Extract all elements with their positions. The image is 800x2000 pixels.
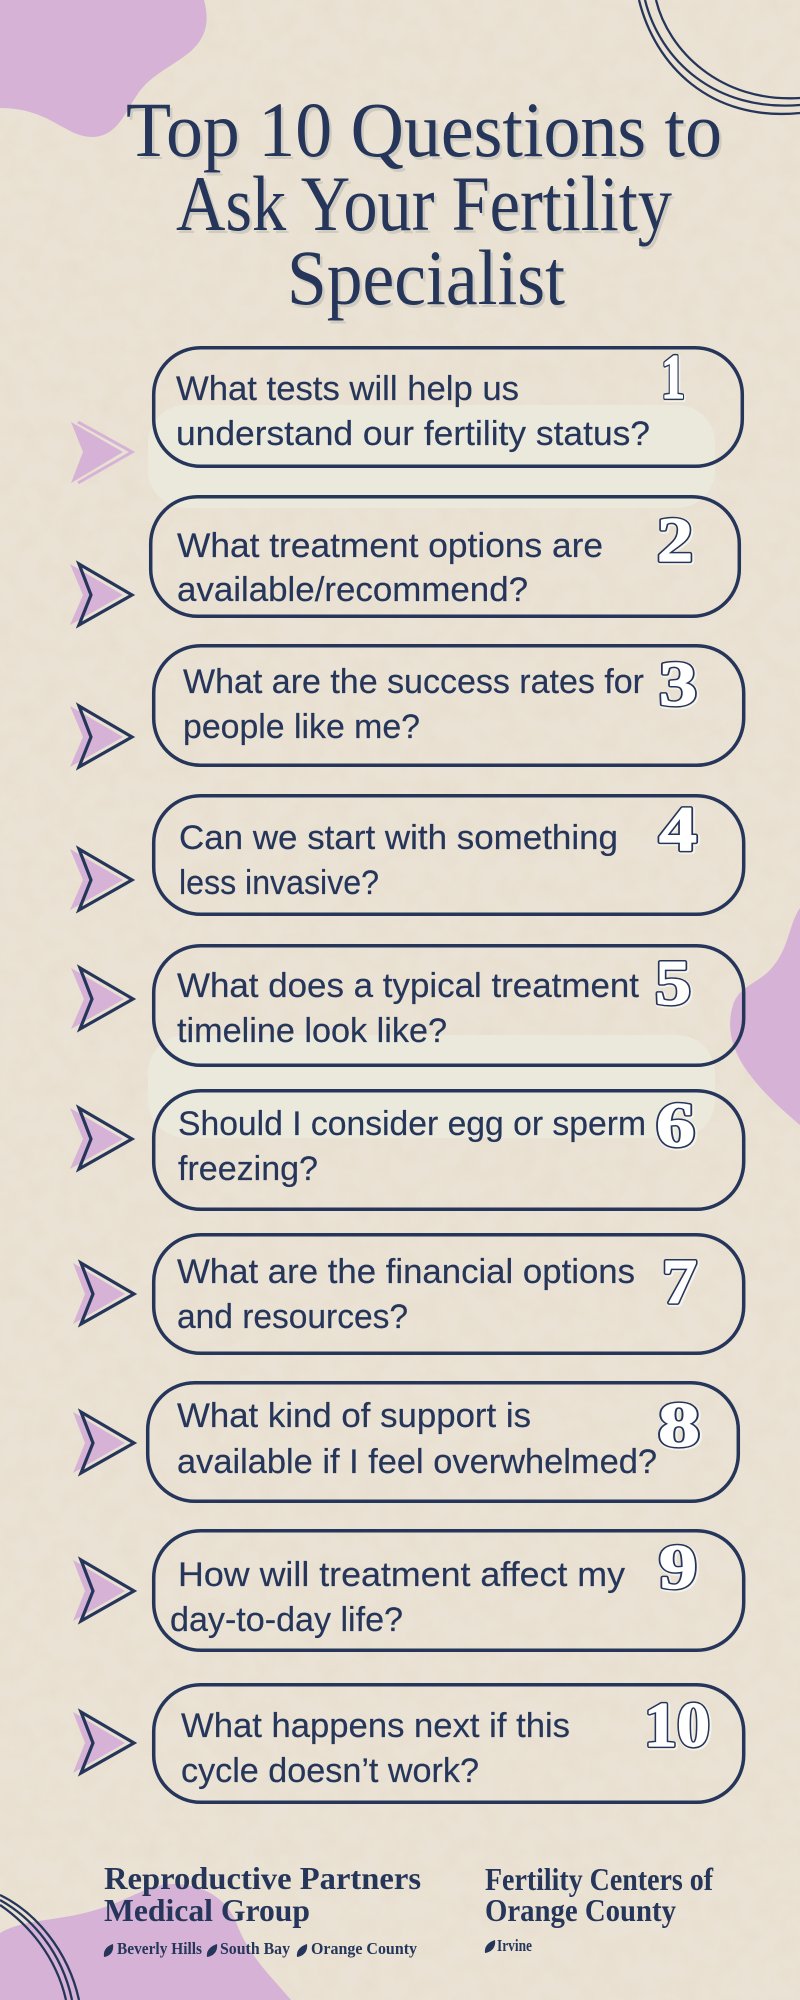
number 9: 9 (660, 1532, 698, 1603)
pill 10 (154, 1685, 744, 1802)
question 3 text: people like me? (183, 708, 420, 746)
logo: Fertility Centers of Orange County: Fertility Centers of (485, 1861, 713, 1897)
number 1: 1 (661, 341, 685, 412)
title: Top 10 Questions to (128, 89, 724, 176)
decorative blob: right (730, 908, 800, 1125)
number 2: 2 (657, 504, 693, 575)
logo: Reproductive Partners Medical Group (104, 1860, 421, 1958)
title: Specialist (290, 237, 568, 324)
arrow 5 (71, 968, 133, 1029)
logo: Reproductive Partners Medical Group: Beverly Hills (117, 1939, 202, 1958)
arrow 1 (71, 422, 132, 483)
number 9: 9 (659, 1531, 697, 1602)
pill 1 (154, 348, 742, 466)
title: Ask Your Fertility (176, 160, 672, 247)
arrow 6 (70, 1108, 132, 1169)
question 6 text: freezing? (178, 1150, 318, 1188)
pill 9 (154, 1531, 744, 1650)
arrow 3 (70, 706, 132, 767)
question 2 text: What treatment options are (177, 527, 603, 565)
decorative rings: bottom left (0, 1895, 79, 2000)
number 4: 4 (660, 794, 698, 865)
icon: leaf (207, 1944, 217, 1957)
question 7 text (177, 1253, 635, 1336)
pill 7 (154, 1235, 744, 1353)
arrow 4 (70, 849, 132, 910)
icon: leaf (485, 1940, 495, 1953)
number 5: 5 (655, 947, 691, 1018)
number 1: 1 (662, 342, 686, 413)
panel: question 1 (71, 341, 742, 483)
question 9 text (170, 1556, 626, 1639)
number 6: 6 (657, 1090, 696, 1161)
number 10: 10 (644, 1689, 710, 1760)
pill 4 (154, 796, 744, 914)
logo: Reproductive Partners Medical Group: Orange County (311, 1939, 417, 1958)
pill 8 (148, 1383, 738, 1501)
question 10 text: cycle doesn’t work? (181, 1752, 479, 1790)
icon: leaf (104, 1944, 113, 1957)
panel: question 4 (70, 793, 744, 914)
logo: Fertility Centers of Orange County: Irvine (497, 1936, 532, 1955)
panel: question 2 (70, 497, 739, 625)
number 4: 4 (659, 793, 697, 864)
question 8 text: What kind of support is (177, 1397, 531, 1435)
question 10 text: What happens next if this (181, 1707, 570, 1745)
question 8 text: available if I feel overwhelmed? (177, 1443, 657, 1481)
panel: question 6 (70, 1089, 744, 1209)
panel: question 3 (70, 646, 744, 767)
logo: Reproductive Partners Medical Group: Reproductive Partners (104, 1860, 421, 1896)
question 5 text: timeline look like? (177, 1012, 447, 1050)
question 3 text: What are the success rates for (183, 663, 644, 701)
question 8 text (177, 1397, 657, 1481)
question 4 text: less invasive? (179, 864, 379, 902)
question 7 text: and resources? (177, 1298, 408, 1336)
number 4: 4 (659, 793, 697, 864)
number 2: 2 (657, 504, 693, 575)
question 1 text: understand our fertility status? (176, 415, 650, 453)
question 6 text (178, 1105, 646, 1188)
number 3: 3 (659, 648, 697, 719)
number 3: 3 (660, 649, 698, 720)
number 7: 7 (663, 1247, 698, 1318)
panel: question 9 (73, 1531, 744, 1650)
logo: Reproductive Partners Medical Group: South Bay (220, 1939, 290, 1958)
pill 3 (154, 646, 744, 765)
decorative blob: top left (0, 0, 207, 137)
arrow 8 (73, 1412, 134, 1473)
panel: question 7 (73, 1235, 744, 1353)
logo: Fertility Centers of Orange County: Orange County (485, 1892, 676, 1928)
question 10 text (181, 1707, 570, 1790)
highlight patch behind questions 1 and 2 (148, 405, 715, 508)
logo: Fertility Centers of Orange County (485, 1861, 713, 1955)
pill 6 (154, 1091, 744, 1209)
number 7: 7 (662, 1246, 697, 1317)
question 9 text: day-to-day life? (170, 1601, 403, 1639)
logo: Reproductive Partners Medical Group: Medical Group (104, 1892, 310, 1928)
arrow 7 (73, 1263, 134, 1324)
panel: question 10 (73, 1685, 744, 1802)
number 10: 10 (645, 1690, 711, 1761)
question 4 text: Can we start with something (179, 819, 618, 857)
number 6: 6 (656, 1089, 695, 1160)
question 6 text: Should I consider egg or sperm (178, 1105, 646, 1143)
highlight patch behind questions 5 and 6 (148, 1035, 715, 1138)
title: Ask Your Fertility (178, 163, 674, 250)
icon: leaf (297, 1944, 307, 1957)
panel: question 5 (71, 946, 744, 1065)
question 3 text (183, 663, 644, 746)
number 10: 10 (644, 1689, 710, 1760)
title: Top 10 Questions to (126, 86, 722, 173)
question 2 text: available/recommend? (177, 571, 528, 609)
number 9: 9 (659, 1531, 697, 1602)
question 4 text (179, 819, 618, 902)
question 5 text (177, 967, 639, 1050)
number 2: 2 (658, 505, 694, 576)
arrow 10 (73, 1712, 134, 1773)
decorative rings: top right (639, 0, 800, 114)
question 2 text (177, 527, 603, 609)
question 5 text: What does a typical treatment (177, 967, 639, 1005)
arrow 9 (73, 1560, 134, 1621)
question 1 text (176, 370, 650, 453)
question 7 text: What are the financial options (177, 1253, 635, 1291)
title: Specialist (287, 234, 565, 321)
question 9 text: How will treatment affect my (178, 1556, 626, 1594)
decorative blob: bottom left (0, 1884, 291, 2000)
number 1: 1 (661, 341, 685, 412)
number 6: 6 (656, 1089, 695, 1160)
number 8: 8 (658, 1389, 700, 1460)
panel: question 8 (73, 1383, 738, 1501)
number 3: 3 (659, 648, 697, 719)
pill 2 (151, 497, 739, 616)
number 7: 7 (662, 1246, 697, 1317)
number 8: 8 (659, 1390, 701, 1461)
pill 5 (154, 946, 744, 1065)
number 8: 8 (658, 1389, 700, 1460)
arrow 2 (70, 564, 132, 625)
question 1 text: What tests will help us (176, 370, 519, 408)
number 5: 5 (656, 948, 692, 1019)
title (126, 86, 724, 324)
number 5: 5 (655, 947, 691, 1018)
